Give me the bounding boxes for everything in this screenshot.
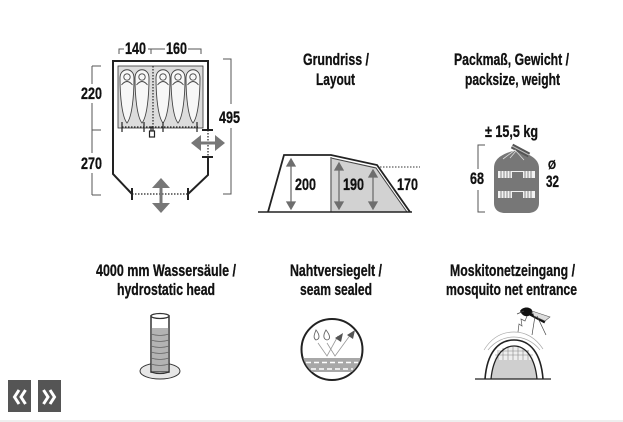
heading: hydrostatic head: 4000 mm Wassersäule / [96,262,236,280]
ground line [258,211,412,213]
bag icon [494,146,539,213]
heading: layout [303,51,369,89]
heading: hydrostatic head: hydrostatic head [117,281,215,299]
heading: mosquito net: Moskitonetzeingang / [450,262,575,280]
icon: water column [140,314,180,379]
button: next [38,380,61,412]
heading: mosquito net [446,262,577,299]
label: 220: 220 [81,84,102,103]
heading: layout: Layout [316,71,355,89]
heading: hydrostatic head [96,262,236,299]
label: 32: 32 [546,172,559,191]
dimension lines [92,49,231,195]
heading: seam sealed: seam sealed [300,281,372,299]
panel: pack bag [470,122,559,213]
label: 160: 160 [166,39,187,58]
label: diameter symbol: Ø [548,158,556,172]
panel: floor plan [81,39,240,213]
outer tent outline [113,61,208,194]
inner cabin area [118,66,203,128]
label: weight: ± 15,5 kg [485,122,538,141]
label: 495: 495 [219,108,240,127]
icon: mosquito net entrance [475,308,551,379]
icon: seam sealed [302,319,362,380]
heading: mosquito net: mosquito net entrance [446,281,577,299]
label: 200: 200 [295,175,316,194]
mosquito [517,308,550,335]
icon: door arrows [152,135,225,213]
heading: seam sealed: Nahtversiegelt / [290,262,382,280]
dotted height line [380,166,420,168]
heading: seam sealed [290,262,382,299]
dimension bracket [478,145,485,212]
inner cabin shading [331,158,407,212]
tent profile outline [268,155,410,212]
panel: side profile [258,155,420,212]
heading: packsize: packsize, weight [465,71,560,89]
button: previous [8,380,31,412]
label: 270: 270 [81,154,102,173]
doors and dotted lines [122,66,213,200]
label: 190: 190 [343,175,364,194]
label: 68: 68 [470,169,484,188]
heading: packsize [454,51,569,89]
heading: layout: Grundriss / [303,51,369,69]
height arrows [287,159,377,209]
label: 170: 170 [397,175,418,194]
heading: packsize: Packmaß, Gewicht / [454,51,569,69]
sleeping bags [120,70,200,123]
label: 140: 140 [125,39,146,58]
